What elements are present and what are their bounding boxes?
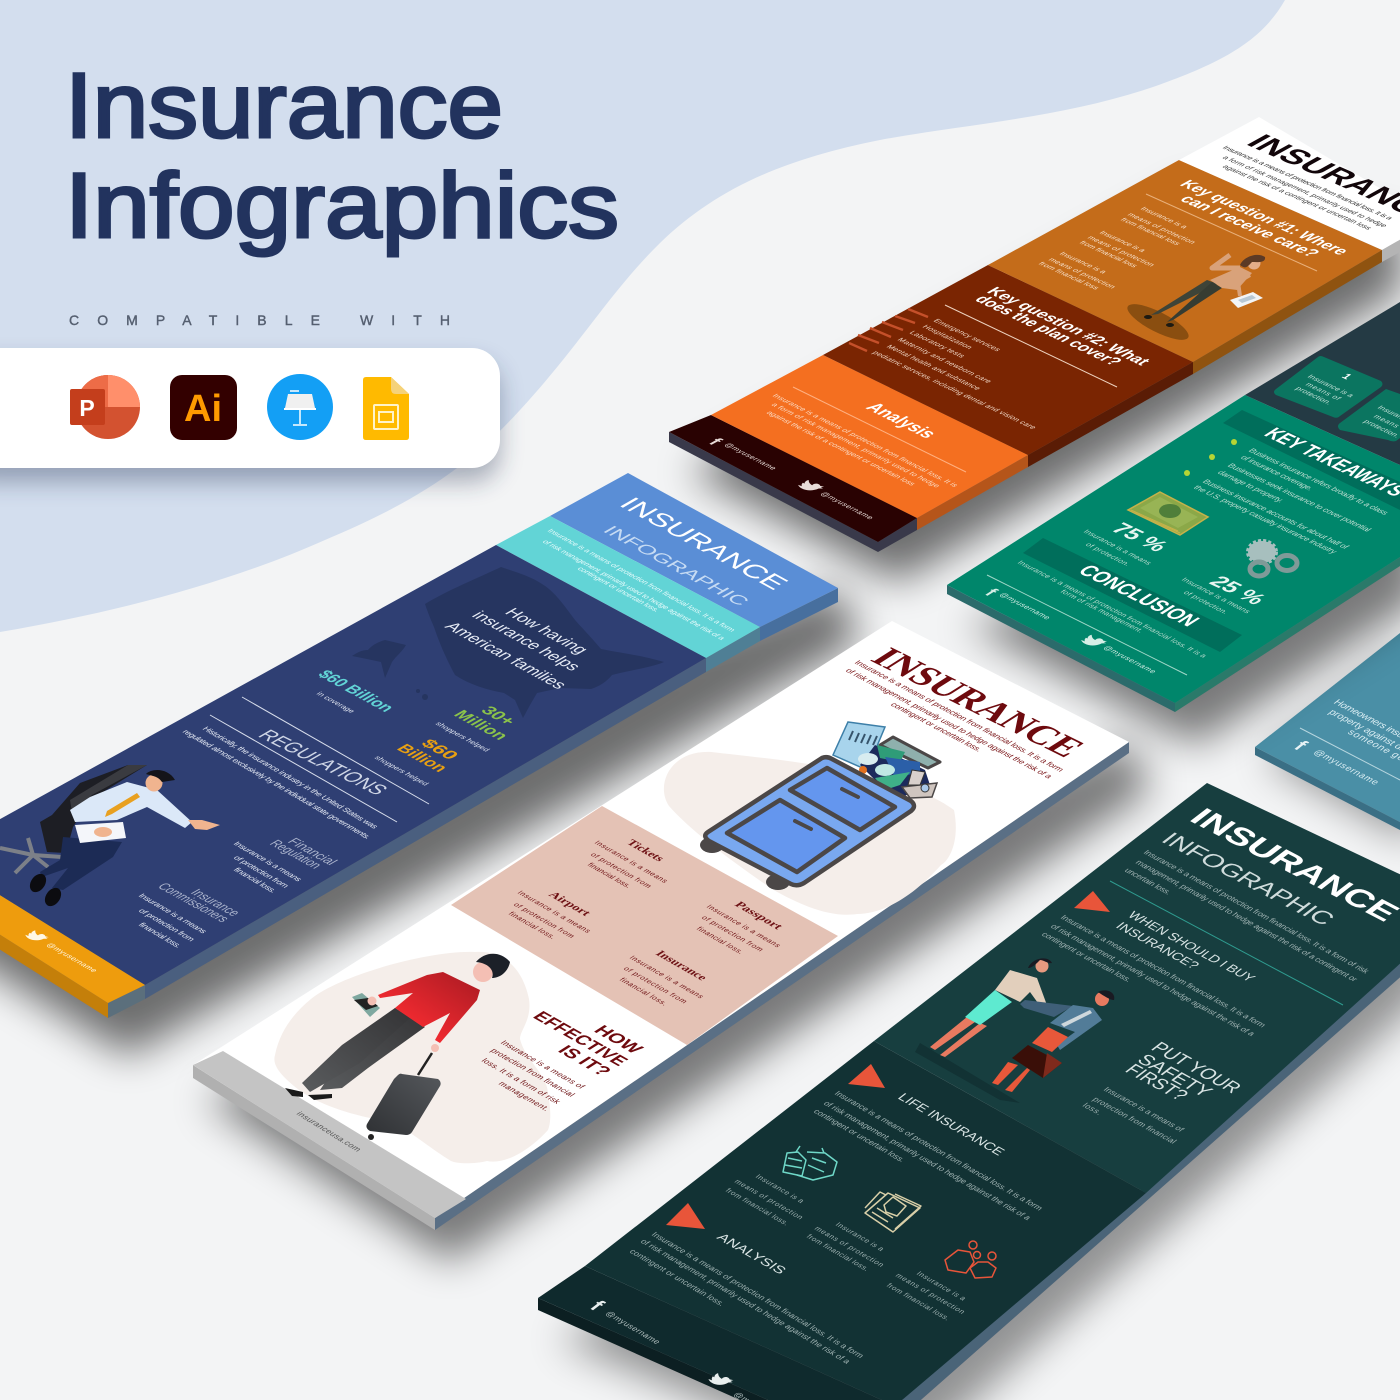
- pink panel text: financial loss.: [506, 910, 558, 940]
- card: orange: Mental health and substance: [884, 344, 983, 391]
- card: orange: Laboratory tests: [907, 330, 968, 359]
- stats: [314, 668, 520, 775]
- card: blue: Insurance: [187, 887, 244, 918]
- icon: powerpoint: P: [79, 395, 95, 421]
- card: blue: insurance helps: [468, 609, 585, 673]
- card: dark green: contingent or uncertain loss.: [627, 1247, 727, 1308]
- put your safety first: SAFETY: [1132, 1051, 1217, 1101]
- card: green: f: [981, 586, 1002, 599]
- background blob: [0, 0, 1285, 632]
- card: blue: Insurance is a means of protection from financial loss. It is a form: [545, 528, 738, 633]
- stat 75: 75 %: [1106, 519, 1174, 555]
- illustration: suitcase: [700, 722, 940, 890]
- icon: illustrator: [170, 375, 237, 440]
- pink panel text: Passport: [731, 900, 785, 931]
- footer: f: [585, 1298, 609, 1315]
- pink panel text: of protection from: [621, 965, 690, 1005]
- card: dark green: of risk management, primarily used to hedge against the risk of a: [638, 1237, 853, 1365]
- stat 75: [1081, 519, 1174, 567]
- card: green: Business insurance refers broadly to a class: [1246, 447, 1391, 516]
- icon: slides: [363, 377, 409, 440]
- footer: @myusername: [722, 442, 779, 471]
- card: dark green: Insurance is a: [833, 1221, 887, 1253]
- title: [65, 55, 619, 257]
- footer: @myusername: [818, 491, 876, 521]
- stats: 30+: [477, 704, 520, 728]
- card: dark green: means of protection: [732, 1178, 806, 1221]
- card: orange: Insurance is a: [1057, 251, 1110, 275]
- card: orange: Emergency services: [931, 318, 1003, 353]
- icon: triangle: [1074, 891, 1110, 912]
- tiles: means of: [1303, 381, 1344, 402]
- pink panel text: financial loss.: [585, 861, 634, 889]
- put your safety first: PUT YOUR: [1146, 1039, 1245, 1097]
- icon: powerpoint: [70, 375, 140, 439]
- key question 1: Key question #1: Where: [1176, 178, 1353, 257]
- card: orange: pediatric services, including dental and vision care: [870, 350, 1039, 430]
- icon: handshake: [783, 1146, 837, 1180]
- card: dark green: Insurance is a means of protection from financial loss. It is a form: [649, 1230, 867, 1360]
- card: dark green: uncertain loss.: [1122, 866, 1174, 896]
- key question 1: can I receive care?: [1176, 193, 1324, 260]
- icon: triangle: [666, 1203, 705, 1229]
- card: orange: Insurance is a means of protection from financial loss. It is: [770, 393, 961, 488]
- card: white: loss. It is a form of risk: [479, 1057, 564, 1106]
- stat 75: Insurance is a means: [1081, 528, 1154, 566]
- icon: family: [945, 1241, 996, 1278]
- card: blue: How having: [501, 606, 593, 656]
- card: dark green: Insurance is a means of: [1101, 1085, 1187, 1134]
- pink panel text: financial loss.: [617, 976, 670, 1007]
- pink panel text: Insurance is a means: [592, 839, 671, 884]
- card: teal partial: [1255, 633, 1400, 840]
- footer: @myusername: [603, 1309, 663, 1346]
- subtitle: COMPATIBLE WITH: [69, 312, 450, 328]
- icon: triangle: [848, 1064, 885, 1088]
- card: white: protection from financial: [488, 1047, 578, 1098]
- how effective: IS IT?: [554, 1042, 616, 1079]
- heading: INSURANCE: [613, 493, 795, 594]
- card: blue: contingent or uncertain loss.: [575, 566, 662, 613]
- tiles: protection.: [1293, 385, 1334, 406]
- card: orange: against the risk of a contingent or uncertain loss: [1220, 164, 1374, 231]
- card: white: contingent or uncertain loss.: [888, 701, 985, 753]
- card: white: Insurance is a means of protection from financial loss. It is a form: [852, 659, 1067, 773]
- card: orange: Insurance is a means of protection from financial loss. It is a: [1220, 145, 1396, 221]
- card: green: [947, 302, 1400, 745]
- key question 2: does the plan cover?: [971, 293, 1126, 368]
- pink panel text: Insurance is a means: [515, 889, 594, 934]
- analysis: Analysis: [861, 400, 941, 441]
- pink panel text: financial loss.: [694, 925, 746, 955]
- title: Infographics: [65, 155, 619, 257]
- pink panel text: [506, 838, 785, 1007]
- heading: INSURANCE: [1182, 803, 1400, 927]
- footer: [705, 436, 876, 521]
- footer: @myusername: [44, 942, 100, 974]
- footer: [585, 1298, 791, 1400]
- card: dark green: contingent or uncertain loss.: [811, 1107, 908, 1164]
- card: blue: of risk management, primarily used to hedge against the risk of a: [540, 539, 728, 642]
- card: orange: means of protection: [1125, 212, 1198, 245]
- stat 25: 25 %: [1204, 572, 1272, 608]
- card: blue: Financial: [284, 836, 341, 867]
- footer: f: [705, 436, 726, 448]
- card: green: CONCLUSION: [1073, 561, 1205, 630]
- card: green: form of risk management.: [1058, 588, 1146, 634]
- pink panel text: Insurance is a means: [704, 903, 783, 949]
- card: dark green: [538, 783, 1400, 1400]
- card: green: Insurance is a means of protection from financial loss. It is a: [1015, 559, 1210, 659]
- title: Insurance: [65, 55, 503, 157]
- card: blue: regulated almost exclusively by the individual state governments.: [180, 728, 374, 840]
- stats: Million: [450, 708, 513, 742]
- card: blue: shoppers helped: [372, 755, 431, 787]
- card: orange: from financial loss: [1077, 240, 1140, 269]
- tiles: [1274, 356, 1400, 441]
- illustration: woman: [1123, 255, 1265, 346]
- card: green: of insurance coverage.: [1238, 454, 1316, 492]
- url: insuranceusa.com: [294, 1110, 364, 1153]
- icon: gears: [1248, 541, 1297, 576]
- illustration: businessman: [0, 765, 220, 909]
- card: green: the U.S. property casualty insurance industry: [1191, 484, 1341, 555]
- card: dark green: Insurance is a means of protection from financial loss. It is a form: [832, 1089, 1046, 1212]
- card: blue: financial loss.: [231, 866, 280, 894]
- card: blue: Regulation: [266, 838, 326, 871]
- card: blue: financial loss.: [136, 921, 185, 949]
- card: blue: shoppers helped: [433, 721, 492, 753]
- card: dark green: loss.: [1080, 1101, 1105, 1116]
- how effective: HOW: [590, 1022, 647, 1056]
- card: white: [193, 621, 1150, 1262]
- stat 25: of protection.: [1181, 589, 1231, 615]
- heading: [599, 493, 795, 609]
- card: dark green: management, primarily used to hedge against the risk of a contingent or: [1133, 858, 1360, 983]
- card: teal partial: @myusername: [1311, 748, 1381, 787]
- card: blue: [0, 473, 860, 1056]
- card: blue: Historically, the insurance industry in the United States was: [200, 725, 381, 830]
- heading: INFOGRAPHIC: [599, 523, 754, 609]
- tiles: Insurance is a: [1305, 373, 1357, 399]
- card: dark green: Insurance is a: [914, 1270, 969, 1302]
- card: dark green: Insurance is a means of protection from financial loss. It is a form: [1058, 913, 1269, 1029]
- key question 2: Key question #2: What: [983, 285, 1155, 368]
- card: blue: Insurance is a means: [136, 892, 210, 935]
- panel: software pill: [0, 348, 500, 482]
- card: orange: a form of risk management, primarily used to hedge: [769, 402, 943, 489]
- card: dark green: INSURANCE?: [1113, 920, 1203, 971]
- card: dark green: Insurance is a means of protection from financial loss. It is a form of risk: [1141, 848, 1372, 975]
- card: green: Businesses seek insurance to cover potential: [1225, 462, 1374, 533]
- conclusion: [1023, 538, 1242, 652]
- illustration: couple: [915, 958, 1114, 1103]
- blobs: [664, 752, 956, 915]
- card: dark green: from financial loss.: [884, 1282, 952, 1322]
- pink panel text: Insurance is a means: [627, 954, 706, 1000]
- card: dark green: of risk management, primarily used to hedge against the risk of a: [821, 1099, 1034, 1222]
- card: dark green: protection from financial: [1090, 1095, 1179, 1145]
- card: dark green: LIFE INSURANCE: [895, 1091, 1008, 1158]
- pink panel text: of protection from: [588, 851, 654, 889]
- footer: [24, 929, 100, 974]
- card: orange: means of protection: [1085, 235, 1157, 268]
- card: orange: against the risk of a contingent or uncertain loss: [764, 410, 918, 487]
- map: [352, 567, 664, 718]
- card: dark green: INFOGRAPHIC: [1156, 828, 1341, 929]
- regulations: [242, 697, 429, 804]
- pink panel text: Tickets: [623, 838, 667, 864]
- stats: Billion: [393, 742, 452, 775]
- stats: $60 Billion: [314, 668, 399, 715]
- pink panel text: of protection from: [699, 914, 766, 953]
- put your safety first: FIRST?: [1120, 1061, 1192, 1104]
- card: blue: of protection from: [231, 854, 292, 889]
- key takeaways: [1223, 410, 1400, 510]
- card: dark green: WHEN SHOULD I BUY: [1125, 909, 1259, 984]
- card: dark green: Insurance is a: [753, 1173, 807, 1205]
- card: orange: Insurance is a: [1138, 206, 1191, 230]
- icon: illustrator: Ai: [184, 388, 222, 430]
- card: dark green: of risk management, primarily used to hedge against the risk of a: [1048, 922, 1258, 1038]
- card: orange: Hospitalization: [920, 324, 975, 350]
- pink panel text: Insurance: [652, 949, 710, 982]
- card: dark green: from financial loss.: [723, 1187, 791, 1227]
- heading: INSURANCE: [861, 642, 1094, 763]
- stats: $60: [417, 737, 463, 762]
- card: orange: Maternity and newborn care: [895, 337, 994, 384]
- card: blue: American families: [441, 620, 571, 692]
- stat 25: Insurance is a means: [1179, 576, 1253, 615]
- stat 75: of protection.: [1083, 541, 1133, 567]
- card: dark green: ANALYSIS: [714, 1231, 790, 1277]
- card: dark green: means of protection: [812, 1225, 886, 1268]
- icon: document: [865, 1192, 921, 1232]
- card: white: Insurance is a means of: [498, 1039, 588, 1090]
- card: dark green: from financial loss.: [804, 1233, 872, 1272]
- card: blue: REGULATIONS: [253, 727, 393, 798]
- card: orange: Insurance is a: [1097, 230, 1149, 254]
- card: dark green: contingent or uncertain loss.: [1039, 930, 1134, 983]
- tiles: 1: [1338, 372, 1354, 381]
- card: orange: means of protection: [1046, 257, 1118, 290]
- card: teal partial: f: [1289, 738, 1312, 754]
- card: dark green: means of protection: [893, 1272, 967, 1315]
- card: green: Business insurance accounts for about half of: [1200, 478, 1352, 551]
- card: white: of risk management, primarily used to hedge against the risk of a: [843, 667, 1055, 780]
- card: blue: in coverage: [314, 691, 357, 714]
- illustration: traveler: [285, 954, 510, 1140]
- pink panel text: Airport: [545, 890, 593, 918]
- card: white: management.: [496, 1080, 553, 1112]
- pink panel text: of protection from: [511, 901, 577, 939]
- card: blue: Commissioners: [154, 881, 233, 924]
- icon: money: [1128, 492, 1208, 535]
- how effective: EFFECTIVE: [529, 1008, 632, 1069]
- card: green: @myusername: [997, 591, 1053, 621]
- icon: keynote: [267, 374, 333, 440]
- card: orange: [669, 117, 1400, 582]
- card: blue: of protection from: [136, 907, 198, 943]
- card: orange: from financial loss: [1036, 261, 1102, 291]
- card: orange: a form of risk management, primarily used to hedge: [1220, 155, 1390, 228]
- card: green: @myusername: [1101, 644, 1159, 675]
- card: orange: from financial loss: [1118, 217, 1183, 246]
- card: green: damage to property.: [1215, 469, 1287, 504]
- card: blue: Insurance is a means: [231, 840, 305, 883]
